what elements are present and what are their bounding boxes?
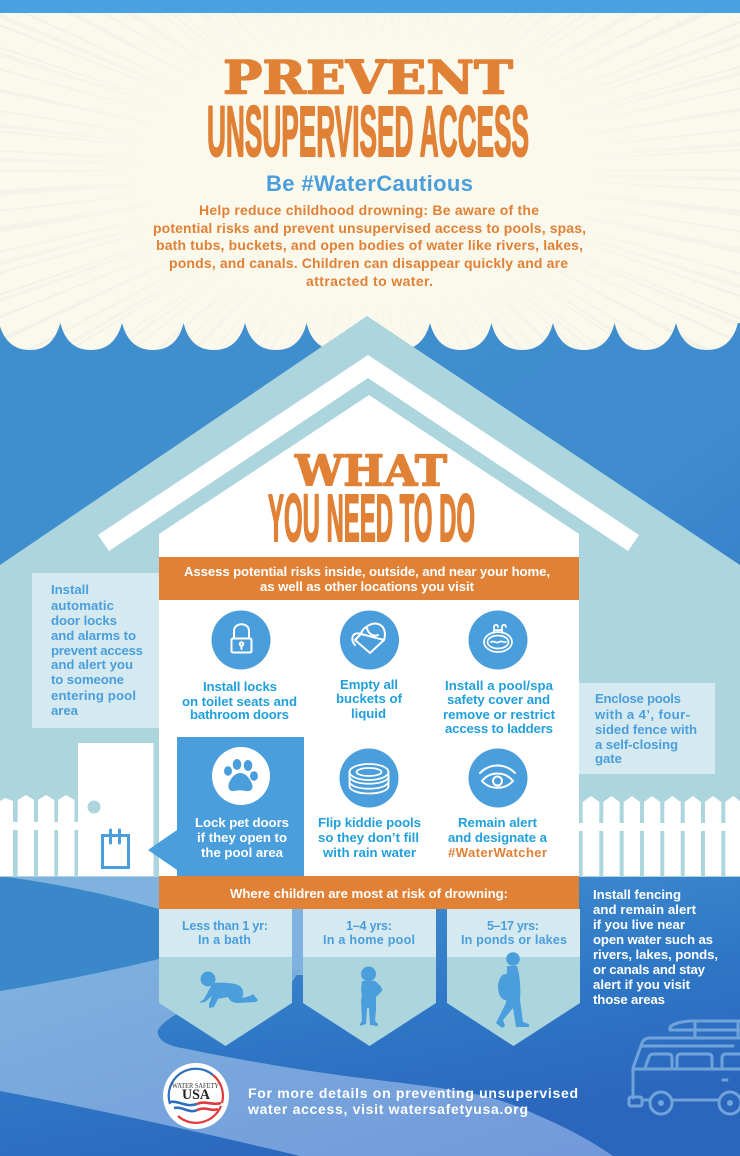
item: remain alert: and designate a	[448, 830, 548, 845]
age panel: 5 to 17 years	[447, 909, 580, 1046]
left callout: door locks: prevent access	[51, 643, 143, 658]
right text: install fencing: or canals and stay	[593, 962, 706, 977]
right callout: fence	[579, 683, 715, 774]
landscape: path and shadows	[0, 876, 613, 1156]
right callout: fence: with a 4’, four-	[594, 707, 690, 722]
left callout: door locks: and alert you	[51, 657, 133, 672]
item: pool cover	[443, 610, 556, 736]
icon: bucket	[352, 624, 385, 653]
item: locks	[182, 610, 297, 722]
panel: lock pet doors: the pool area	[201, 845, 284, 860]
left callout: door locks: door locks	[51, 613, 117, 628]
icon: standing toddler	[360, 966, 382, 1026]
item: remain alert: #WaterWatcher	[448, 845, 547, 860]
left callout: door locks	[32, 573, 159, 728]
banner: assess risks: Assess potential risks inside, outside, and near your home,	[184, 564, 550, 579]
item: buckets: buckets of	[336, 691, 403, 706]
subtitle: Be #WaterCautious	[266, 171, 473, 196]
item: kiddie pools: Flip kiddie pools	[318, 815, 421, 830]
age panel: 1 to 4 years: 1–4 yrs:	[346, 919, 392, 933]
logo: water safety usa	[163, 1063, 229, 1129]
left callout: door locks: entering pool	[51, 688, 136, 703]
left callout: door locks: automatic	[51, 598, 114, 613]
item: locks: on toilet seats and	[182, 694, 297, 709]
left callout: door locks: to someone	[51, 672, 124, 687]
banner: assess risks	[159, 557, 579, 600]
icon: padlock	[232, 624, 252, 652]
right text: install fencing: if you live near	[593, 917, 685, 932]
age panel: 5 to 17 years: 5–17 yrs:	[487, 919, 539, 933]
right text: install fencing: those areas	[593, 992, 665, 1007]
age panel: 1 to 4 years: In a home pool	[323, 933, 415, 947]
intro paragraph: attracted to water.	[306, 273, 433, 289]
heading: what you need to do	[268, 446, 475, 556]
right fence	[579, 796, 740, 876]
intro paragraph: ponds, and canals. Children can disappear quickly and are	[169, 255, 568, 271]
left callout: door locks: area	[51, 703, 79, 718]
icon: walking child with backpack	[496, 952, 529, 1028]
right callout: fence: Enclose pools	[595, 691, 681, 706]
banner: where children are most at risk	[159, 876, 579, 909]
banner: where children are most at risk: Where children are most at risk of drowning:	[230, 886, 508, 901]
icon: crawling baby	[199, 972, 258, 1008]
left callout: door locks: and alarms to	[51, 628, 136, 643]
title	[207, 50, 529, 172]
icon: pool with ladder	[484, 625, 512, 652]
sky with scalloped edge	[0, 323, 740, 880]
top bar	[0, 0, 740, 13]
footer text: For more details on preventing unsupervised	[248, 1085, 578, 1101]
item: pool cover: access to ladders	[445, 721, 553, 736]
logo: water safety usa: USA	[182, 1087, 210, 1103]
left fence	[0, 795, 80, 876]
right text: install fencing: rivers, lakes, ponds,	[593, 947, 718, 962]
house roof	[0, 316, 740, 877]
title: PREVENT	[223, 50, 513, 104]
age panel: less than 1 year	[159, 909, 292, 1046]
right callout: fence: gate	[595, 751, 622, 766]
water ground	[0, 876, 740, 1156]
right text: install fencing: and remain alert	[593, 902, 697, 917]
icon: notebook	[102, 830, 128, 868]
item: kiddie pools	[318, 748, 421, 860]
roof chevron	[98, 355, 639, 551]
footer text	[247, 1085, 578, 1117]
banner: assess risks: as well as other locations you visit	[260, 579, 475, 594]
icon: eye	[480, 766, 515, 788]
item: pool cover: Install a pool/spa	[445, 678, 554, 693]
item: kiddie pools: with rain water	[322, 845, 416, 860]
right callout: fence: sided fence with	[595, 722, 697, 737]
intro paragraph: potential risks and prevent unsupervised access to pools, spas,	[153, 220, 586, 236]
icon: kiddie pool	[350, 764, 388, 794]
item: pool cover: remove or restrict	[443, 707, 556, 722]
item: remain alert: Remain alert	[458, 815, 538, 830]
item: pool cover: safety cover and	[447, 692, 550, 707]
background: sunburst rays	[0, 13, 740, 350]
right text: install fencing: alert if you visit	[593, 977, 691, 992]
icon: camper van	[629, 1021, 740, 1114]
item: buckets: liquid	[351, 706, 386, 721]
intro paragraph: Help reduce childhood drowning: Be aware of the	[199, 202, 539, 218]
panel: lock pet doors: if they open to	[197, 830, 287, 845]
right text: install fencing	[593, 887, 718, 1007]
age panel: 5 to 17 years: In ponds or lakes	[461, 933, 567, 947]
item: buckets	[336, 610, 403, 721]
item: locks: bathroom doors	[190, 707, 289, 722]
age panel: 1 to 4 years	[303, 909, 436, 1046]
panel: lock pet doors: Lock pet doors	[195, 815, 289, 830]
item: kiddie pools: so they don’t fill	[318, 830, 419, 845]
footer text: water access, visit watersafetyusa.org	[247, 1101, 528, 1117]
door	[78, 743, 154, 876]
intro paragraph: bath tubs, buckets, and open bodies of water like rivers, lakes,	[156, 237, 583, 253]
right callout: fence: a self-closing	[595, 737, 678, 752]
age panel: less than 1 year: In a bath	[198, 933, 251, 947]
intro paragraph	[153, 202, 586, 289]
house front	[159, 395, 579, 877]
item: remain alert	[448, 748, 548, 860]
left callout: door locks: Install	[51, 582, 89, 597]
heading: what you need to do: WHAT	[294, 446, 447, 496]
age panel: less than 1 year: Less than 1 yr:	[182, 919, 268, 933]
right text: install fencing: Install fencing	[593, 887, 681, 902]
logo: water safety usa: WATER SAFETY	[172, 1081, 219, 1090]
right text: install fencing: open water such as	[593, 932, 713, 947]
icon: paw	[224, 759, 258, 791]
item: locks: Install locks	[203, 679, 277, 694]
item: buckets: Empty all	[340, 677, 398, 692]
panel: lock pet doors	[148, 737, 304, 876]
